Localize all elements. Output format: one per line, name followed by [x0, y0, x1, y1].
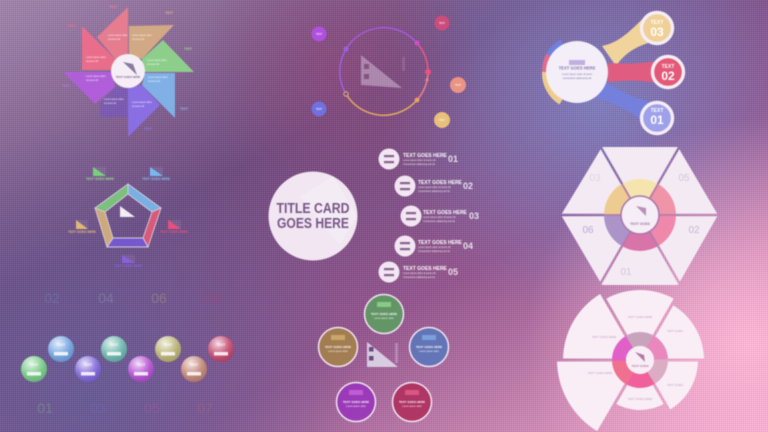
list item 03: TEXT GOES HERE: [423, 210, 468, 216]
pie colour ring: [611, 331, 669, 389]
pinwheel blade captions: TEXT: [144, 127, 152, 131]
pentagon segment: red: [143, 208, 161, 247]
orbit satellite: yellow: TEXT: [439, 119, 446, 122]
bubble timeline: [21, 290, 234, 416]
pinwheel blade captions: Lorem ipsum dolor: [108, 34, 128, 37]
list item 03: 03: [469, 211, 479, 221]
pinwheel blade captions: TEXT: [165, 11, 173, 15]
list item 03: Lorem ipsum dolor sit amet elit: [423, 216, 456, 219]
cluster film triangle icon: [367, 342, 398, 367]
list item 02: TEXT GOES HERE: [418, 180, 463, 186]
cluster circle: red: [392, 382, 432, 422]
timeline numbers: [37, 290, 221, 416]
list item 05: [378, 262, 458, 282]
pie sector: bottom: [616, 374, 664, 410]
bubble 07: [181, 356, 207, 382]
pinwheel blade captions: TEXT: [68, 24, 76, 28]
cluster circle: orange: Lorem ipsum dolor: [328, 350, 348, 353]
pie sector: top left: [562, 294, 625, 360]
pinwheel blade captions: TEXT: [184, 47, 192, 51]
hexagon panel 06: [562, 216, 622, 285]
pie centre: [626, 346, 654, 374]
main circle: [546, 41, 608, 103]
list item 05: Consectetur adipiscing sed do: [403, 276, 436, 279]
pentagon callout: red: TEXT GOES HERE: [160, 230, 188, 234]
timeline numbers: 01: [37, 400, 53, 416]
blade: blue: [142, 73, 175, 118]
list item 03: Consectetur adipiscing sed do: [423, 220, 456, 223]
pentagon segment: yellow: [95, 208, 113, 247]
blade: red: [82, 26, 116, 70]
hexagon panel 03: 03: [589, 173, 601, 184]
blade: orange: [129, 25, 174, 59]
main circle: TEXT GOES HERE: [559, 66, 596, 70]
pentagon callout: green: TEXT GOES HERE: [86, 177, 114, 181]
pinwheel blade captions: Lorem ipsum dolor: [132, 34, 152, 37]
cluster circle: green: [364, 294, 404, 334]
node 03: 03: [650, 25, 664, 39]
orbit arc: red: [417, 43, 428, 72]
node 02: 02: [661, 69, 675, 83]
bubble 05: TEXT: [137, 363, 146, 367]
main circle: Lorem ipsum dolor sit amet: [562, 73, 592, 76]
timeline numbers: 07: [197, 400, 213, 416]
hexagon panel 02: 02: [688, 225, 700, 236]
pinwheel blade captions: Lorem ipsum dolor: [104, 98, 124, 101]
bubble 06: [155, 336, 181, 362]
pinwheel blade captions: sit amet elit: [148, 80, 160, 83]
list item 02: [394, 176, 473, 196]
bubble 06: TEXT: [164, 343, 173, 347]
list item 05: Lorem ipsum dolor sit amet elit: [403, 272, 436, 275]
cluster circle: purple: Lorem ipsum dolor: [346, 405, 366, 408]
list item 01: Lorem ipsum dolor sit amet elit: [403, 159, 436, 162]
numbered list: [378, 148, 479, 282]
cluster circle: blue: TEXT GOES HERE: [416, 345, 442, 349]
pinwheel blade captions: sit amet elit: [108, 38, 120, 41]
list item 01: [378, 148, 458, 170]
hexagon centre: TEXT GOES: [630, 222, 651, 226]
cluster circle: red: TEXT GOES HERE: [399, 400, 425, 404]
cluster circle: orange: TEXT GOES HERE: [325, 345, 351, 349]
orbit satellite: magenta: [312, 26, 326, 42]
bubble 08: [208, 336, 234, 362]
node 03: [642, 12, 672, 44]
pinwheel blade captions: sit amet elit: [132, 105, 144, 108]
node 01: TEXT: [651, 108, 663, 114]
orbit satellite: salmon: TEXT: [455, 84, 462, 87]
hexagon centre: [621, 196, 659, 234]
pie sectors: [557, 290, 704, 432]
connector: red: [608, 61, 656, 83]
timeline numbers: 06: [151, 290, 167, 306]
list item 04: 04: [463, 241, 473, 251]
hexagon panel 03: [562, 149, 622, 214]
orbit satellite: yellow: [434, 112, 450, 128]
blade: violet: [128, 85, 160, 137]
orbit arc: violet: [346, 28, 417, 49]
pie captions: TEXT GOES: [667, 329, 683, 333]
pinwheel diagram: [62, 5, 194, 137]
hexagon diagram: [561, 147, 718, 285]
timeline numbers: 08: [205, 290, 221, 306]
bubble 07: TEXT: [190, 363, 199, 367]
hexagon dividers: [604, 184, 676, 246]
orbit satellite: salmon: [450, 77, 466, 93]
orbit arc: purple: [340, 49, 346, 94]
timeline numbers: 02: [44, 290, 60, 306]
orbit ring diagram: [312, 16, 466, 128]
five circle cluster: [318, 294, 448, 422]
list item 04: Lorem ipsum dolor sit amet elit: [418, 246, 451, 249]
hexagon colour ring: [602, 177, 678, 253]
main circle: consectetur adipiscing elit: [563, 77, 592, 80]
hexagon panel 01: 01: [620, 267, 632, 278]
list item 02: Lorem ipsum dolor sit amet elit: [418, 186, 451, 189]
pie centre: TEXT GOES: [631, 364, 649, 368]
pie captions: TEXT GOES HERE: [592, 335, 616, 339]
orbit arc: orange: [346, 94, 417, 115]
pentagon callout: purple: TEXT GOES HERE: [114, 264, 142, 268]
orbit satellite: red: [434, 16, 450, 30]
list item 01: 01: [448, 154, 458, 164]
connector diagram: [545, 12, 684, 134]
connector: blue: [596, 82, 650, 122]
title text: TITLE CARD: [276, 201, 350, 217]
pie diagram: [557, 290, 704, 432]
timeline numbers: 04: [98, 290, 114, 306]
blade: green: [142, 40, 194, 72]
orbit nodes: [343, 40, 431, 102]
list item 02: 02: [463, 181, 473, 191]
bubble 01: [21, 356, 47, 382]
left arc band: [545, 42, 562, 102]
pie captions: TEXT GOES HERE: [588, 371, 612, 375]
pie sector: lower right: [655, 361, 698, 410]
cluster circle: blue: [410, 328, 448, 366]
bubble 08: TEXT: [217, 343, 226, 347]
orbit satellite: red: TEXT: [439, 22, 446, 25]
pinwheel blade captions: Lorem ipsum dolor: [132, 101, 152, 104]
node 03: TEXT: [651, 20, 663, 26]
pentagon diagram: [68, 167, 188, 268]
node 02: TEXT: [662, 64, 674, 70]
pentagon segment: blue: [128, 184, 161, 212]
hexagon panels: [561, 147, 718, 285]
pie sector: top: [606, 290, 674, 336]
pinwheel blade captions: Lorem ipsum dolor: [147, 59, 167, 62]
pie sector: lower left: [556, 360, 625, 432]
list item 05: 05: [448, 267, 458, 277]
cluster circle: green: Lorem ipsum dolor: [374, 317, 394, 320]
hexagon panel 06: 06: [582, 225, 594, 236]
pinwheel blade captions: TEXT: [180, 107, 188, 111]
pie captions: TEXT GOES: [667, 383, 683, 387]
bubble 03: [75, 356, 101, 382]
pentagon segment: green: [95, 184, 128, 212]
pinwheel blade captions: Lorem ipsum dolor: [86, 75, 106, 78]
connector: yellow: [602, 16, 652, 66]
film triangle icon: [361, 55, 405, 88]
orbit satellite: magenta: TEXT: [316, 33, 323, 36]
list item 01: Consectetur adipiscing sed do: [403, 163, 436, 166]
bubble 04: TEXT: [110, 343, 119, 347]
orbit satellite: blue: [312, 102, 326, 116]
node 01: 01: [650, 113, 664, 127]
timeline numbers: 05: [144, 400, 160, 416]
cluster circle: blue: Lorem ipsum dolor: [419, 350, 439, 353]
pie captions: [588, 315, 683, 401]
bubble 05: [128, 356, 154, 382]
list item 04: Consectetur adipiscing sed do: [418, 250, 451, 253]
orbit arc: salmon: [417, 72, 428, 100]
hexagon panel 05: 05: [678, 173, 690, 184]
title text: GOES HERE: [277, 216, 349, 232]
blade: magenta: [63, 72, 115, 104]
cluster circle: orange: [318, 328, 358, 366]
pie captions: TEXT GOES HERE: [628, 397, 652, 401]
bubble 03: TEXT: [84, 363, 93, 367]
pinwheel blade captions: TEXT: [109, 5, 117, 9]
pinwheel blade captions: sit amet elit: [104, 102, 116, 105]
cluster circle: purple: [336, 382, 376, 422]
title card: [268, 172, 358, 260]
bubble 02: TEXT: [57, 343, 66, 347]
hexagon panel: top: [602, 146, 678, 184]
pie captions: TEXT GOES HERE: [628, 315, 652, 319]
pinwheel blade captions: sit amet elit: [147, 63, 159, 66]
cluster circle: red: Lorem ipsum dolor: [402, 405, 422, 408]
pinwheel blade captions: [62, 5, 192, 131]
list item 05: TEXT GOES HERE: [403, 266, 448, 272]
list item 02: Consectetur adipiscing sed do: [418, 190, 451, 193]
node 02: [652, 56, 684, 88]
pinwheel blade captions: sit amet elit: [86, 79, 98, 82]
bubble 02: [48, 336, 74, 362]
pinwheel blade captions: Lorem ipsum dolor: [148, 76, 168, 79]
pinwheel blade captions: sit amet elit: [132, 38, 144, 41]
hexagon panel 01: [602, 246, 678, 286]
blade: indigo: [100, 87, 128, 117]
pinwheel centre: TEXT GOES HERE: [116, 75, 140, 79]
bubble 04: [101, 336, 127, 362]
blade: coral: [97, 7, 128, 60]
list item 01: TEXT GOES HERE: [403, 153, 448, 159]
pinwheel blade captions: sit amet elit: [86, 60, 98, 63]
timeline numbers: 03: [90, 400, 106, 416]
node 01: [642, 102, 672, 134]
list item 03: [400, 206, 479, 226]
pie sector: top right: [655, 305, 704, 359]
list item 04: [394, 236, 473, 256]
pinwheel blade captions: TEXT: [62, 84, 70, 88]
hexagon panel 02: [658, 216, 718, 285]
hexagon panel 05: [658, 149, 718, 214]
orbit satellite: blue: TEXT: [316, 108, 323, 111]
pentagon segment: violet: [107, 238, 148, 247]
bubble 01: TEXT: [30, 363, 39, 367]
pentagon callout: blue: TEXT GOES HERE: [142, 177, 170, 181]
pentagon callout: yellow: TEXT GOES HERE: [68, 230, 96, 234]
cluster circle: purple: TEXT GOES HERE: [343, 400, 369, 404]
pentagon centre icon: [120, 206, 135, 217]
pinwheel blade captions: Lorem ipsum dolor: [86, 56, 106, 59]
list item 04: TEXT GOES HERE: [418, 240, 463, 246]
cluster circle: green: TEXT GOES HERE: [371, 312, 397, 316]
